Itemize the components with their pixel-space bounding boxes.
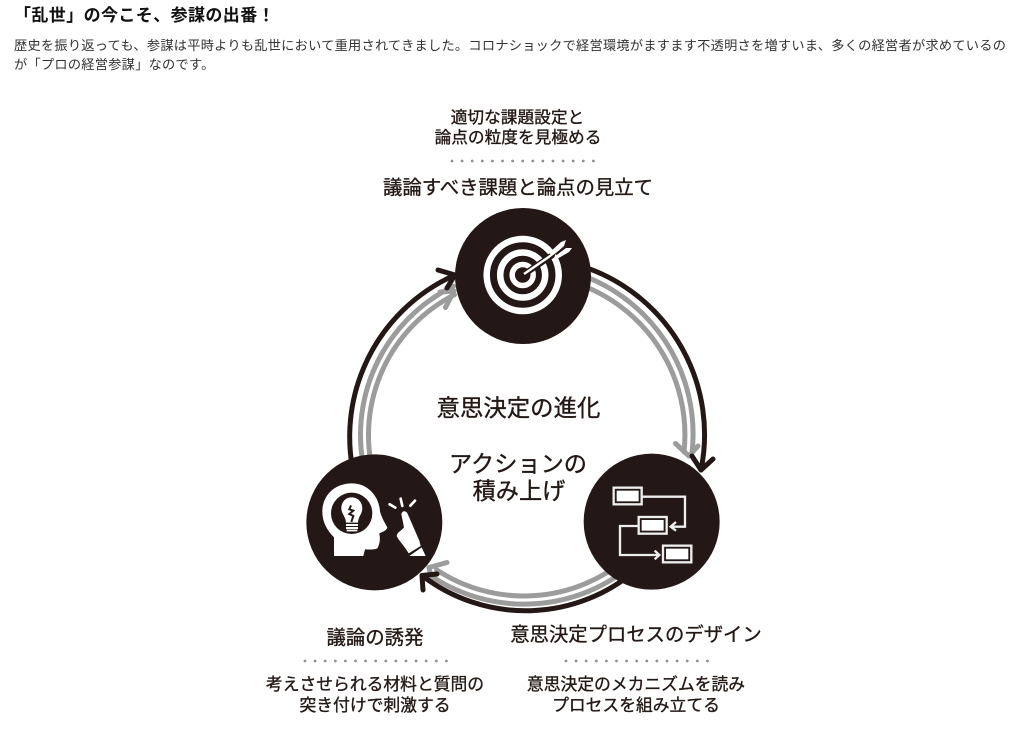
icon: head with light bulb and pointing finger xyxy=(306,454,442,590)
icon: target with arrow xyxy=(455,208,591,344)
title: 「乱世」の今こそ、参謀の出番！ xyxy=(14,6,275,25)
right label block: 意思決定プロセスのデザイン xyxy=(510,624,762,646)
arrow: right to left xyxy=(422,558,637,611)
center label: 積み上げ xyxy=(473,478,565,504)
left label block: 議論の誘発 xyxy=(327,627,423,649)
right label block: 意思決定のメカニズムを読み xyxy=(527,675,745,694)
center label: アクションの xyxy=(449,451,587,477)
intro text: が「プロの経営参謀」なのです。 xyxy=(14,57,215,72)
arrow: left to top xyxy=(350,270,455,496)
intro text: 歴史を振り返っても、参謀は平時よりも乱世において重用されてきました。コロナショックで経営環境がますます不透明さを増すいま、多くの経営者が求めているの xyxy=(14,38,1006,53)
right label block xyxy=(510,624,762,715)
top label block: 論点の粒度を見極める xyxy=(435,128,601,147)
intro text xyxy=(14,38,1006,72)
arrow: top to right xyxy=(569,269,713,470)
left label block: 考えさせられる材料と質問の xyxy=(266,675,484,694)
top label block: 適切な課題設定と xyxy=(451,108,584,127)
left label block xyxy=(266,627,484,715)
left label block: 突き付けで刺激する xyxy=(299,696,451,715)
top label block xyxy=(383,108,653,199)
center label xyxy=(437,395,600,504)
right label block: プロセスを組み立てる xyxy=(552,696,720,715)
top label block: 議論すべき課題と論点の見立て xyxy=(383,177,653,199)
center label: 意思決定の進化 xyxy=(437,395,600,421)
icon: process flow xyxy=(584,454,720,590)
